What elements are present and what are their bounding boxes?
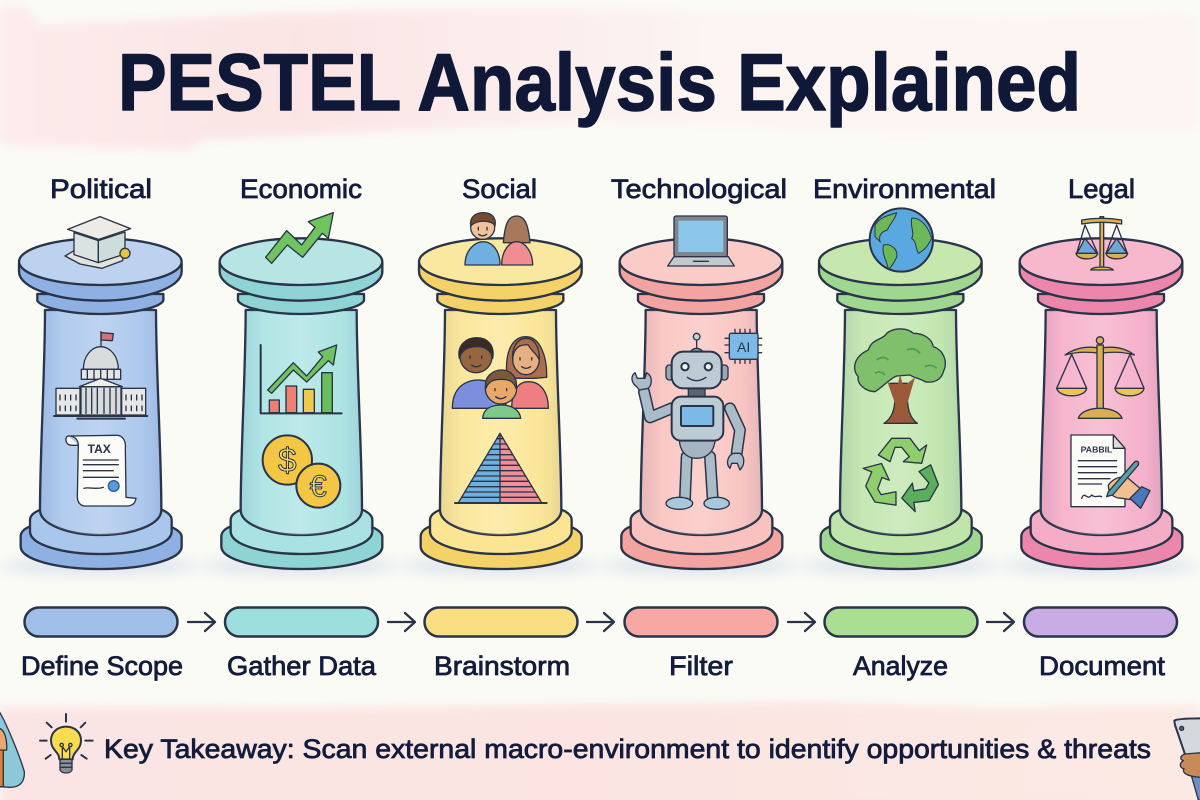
- icon: green growth arrow: [266, 213, 333, 263]
- icon: couple on top: [465, 213, 533, 265]
- arrow: [788, 613, 815, 631]
- label: Technological: Technological: [611, 174, 787, 204]
- icon: hand holding tablet at right edge: [1174, 718, 1200, 800]
- icon: robot: [632, 333, 744, 509]
- step bar: Brainstorm: [424, 608, 578, 636]
- process timeline: [21, 608, 1177, 681]
- takeaway text: Key Takeaway: Scan external macro-environment to identify opportunities & threats: [104, 734, 1151, 764]
- arrow: [587, 613, 614, 631]
- icon: large scales: [1057, 337, 1144, 418]
- pillar: Political: [19, 217, 182, 569]
- icon: small scales on top: [1076, 217, 1128, 270]
- icon: family portrait: [452, 337, 548, 418]
- pillar: Environmental: [819, 208, 982, 569]
- label: Political: Political: [50, 174, 152, 204]
- step label: Define Scope: Define Scope: [21, 651, 183, 681]
- icon: globe: [870, 208, 933, 272]
- arrow: [987, 613, 1014, 631]
- pillar: Technological: [620, 216, 782, 569]
- step bar: Filter: [624, 608, 778, 636]
- label: Environmental: Environmental: [813, 174, 996, 204]
- pillar: Legal: [1020, 217, 1182, 569]
- takeaway banner wash: [0, 702, 1200, 800]
- icon: recycle symbol: [857, 438, 945, 515]
- ground shadows: [0, 557, 1200, 575]
- document heading: PABBIL: [1081, 445, 1112, 455]
- title banner wash: [0, 5, 1200, 150]
- label: Economic: Economic: [240, 174, 362, 204]
- step label: Document: Document: [1039, 651, 1166, 681]
- step bar: Document: [1024, 608, 1177, 636]
- icon: AI chip: [725, 329, 762, 363]
- pillar: Social: [419, 213, 582, 569]
- label: Legal: Legal: [1068, 174, 1135, 204]
- icon: laptop: [668, 216, 734, 266]
- label: Social: Social: [462, 174, 537, 204]
- euro sign: €: [310, 470, 327, 504]
- icon: dollar and euro coins: [263, 435, 340, 508]
- step label: Brainstorm: Brainstorm: [434, 651, 570, 681]
- dollar sign: $: [278, 443, 297, 480]
- pillar: Economic: [220, 213, 382, 569]
- icon: signed document: [1071, 435, 1150, 508]
- step bar: Define Scope: [24, 608, 178, 636]
- title: PESTEL Analysis Explained: [118, 38, 1081, 128]
- step bar: Gather Data: [225, 608, 378, 636]
- step label: Filter: Filter: [669, 651, 733, 681]
- icon: tree: [855, 329, 945, 423]
- icon: presenter at left edge: [0, 710, 24, 787]
- arrow: [388, 613, 415, 631]
- icon: bar chart with trend: [261, 345, 342, 413]
- step label: Analyze: Analyze: [853, 651, 948, 681]
- icon: tax scroll: [66, 435, 136, 506]
- icon: lightbulb: [40, 714, 93, 773]
- icon: government building on top: [65, 217, 131, 268]
- arrow: [188, 613, 215, 631]
- tax label: TAX: [88, 442, 111, 456]
- icon: population pyramid: [455, 433, 547, 503]
- step bar: Analyze: [824, 608, 978, 636]
- step label: Gather Data: Gather Data: [227, 651, 377, 681]
- icon: capitol building: [54, 332, 147, 419]
- pillar labels: [50, 174, 1135, 204]
- chip label: AI: [737, 339, 750, 355]
